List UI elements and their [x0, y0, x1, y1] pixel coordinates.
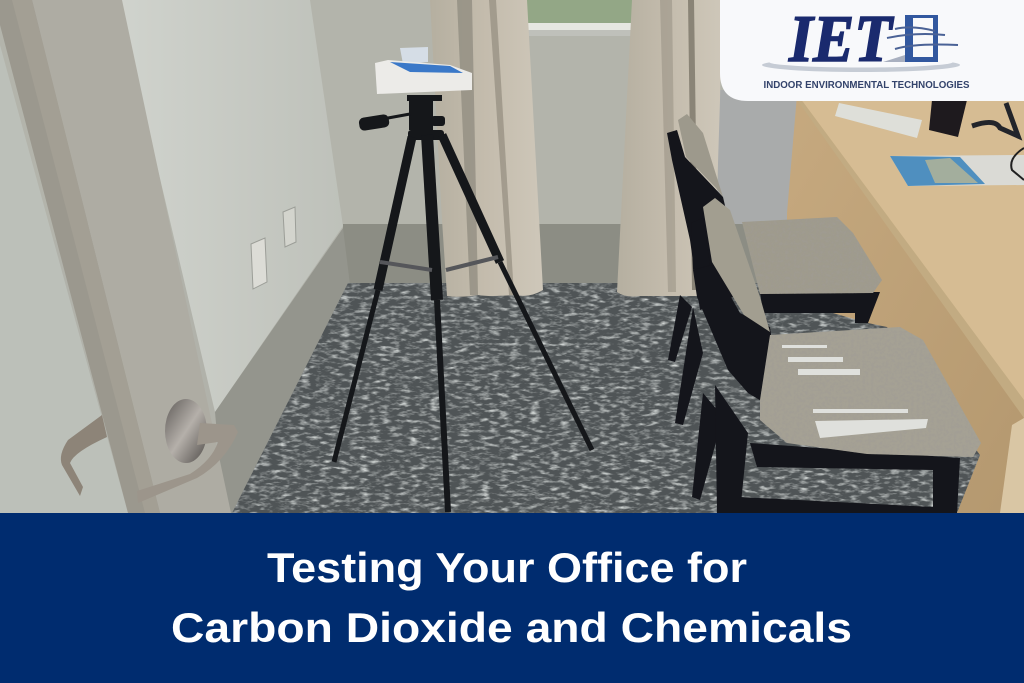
tripod head and handle [358, 95, 445, 140]
door stile [30, 0, 231, 513]
door metal edge [0, 0, 160, 513]
logo panel [720, 0, 1024, 101]
door handle: outer lever [137, 423, 238, 503]
name plate [835, 103, 922, 138]
front chair seat [755, 325, 985, 460]
right wall section [718, 90, 798, 225]
black book [929, 100, 967, 137]
black stand [972, 103, 1018, 136]
title line 2: Carbon Dioxide and Chemicals [171, 604, 852, 651]
right curtain [617, 0, 722, 296]
desk top [797, 95, 1024, 402]
desk front panel [787, 95, 1024, 513]
left wall [118, 0, 343, 412]
desk leg [1000, 418, 1024, 513]
rear chair [667, 114, 885, 362]
front chair rails [740, 443, 960, 513]
front chair back cushion [703, 198, 770, 332]
front chair rear legs [675, 307, 723, 500]
window reflections on seat [782, 345, 928, 438]
rear chair rail [760, 292, 880, 323]
tripod [334, 47, 592, 512]
rear chair frame [667, 130, 745, 310]
door [0, 0, 238, 513]
front chair upper frame [691, 218, 710, 270]
rear chair back cushion [678, 114, 723, 197]
carpet [220, 283, 1024, 513]
logo tagline: INDOOR ENVIRONMENTAL TECHNOLOGIES [764, 80, 970, 91]
front chair back panel [693, 265, 778, 402]
left curtain [430, 0, 543, 297]
desk items [835, 100, 1024, 186]
title banner [0, 513, 1024, 683]
title line 1: Testing Your Office for [267, 544, 747, 591]
door handle: inner lever [61, 415, 107, 496]
air quality meter [375, 47, 472, 94]
tripod legs [334, 135, 592, 512]
rear chair legs [668, 295, 692, 362]
back wall [0, 0, 800, 240]
logo building icon [883, 15, 958, 62]
front chair stile [715, 385, 748, 513]
back baseboard [343, 224, 800, 284]
brochure [890, 155, 1024, 186]
rear chair seat [740, 215, 885, 295]
window [525, 0, 632, 36]
front chair [675, 198, 985, 513]
door handle: rose [165, 399, 207, 463]
leg braces [380, 257, 498, 270]
door glass [0, 45, 128, 513]
side baseboard [215, 228, 350, 513]
wall outlets [251, 207, 296, 289]
logo letters: IET [788, 2, 895, 76]
cable [1011, 148, 1024, 180]
desk edge [797, 100, 1024, 418]
photo: office room with tripod [0, 0, 1024, 513]
logo swoosh [762, 58, 960, 72]
